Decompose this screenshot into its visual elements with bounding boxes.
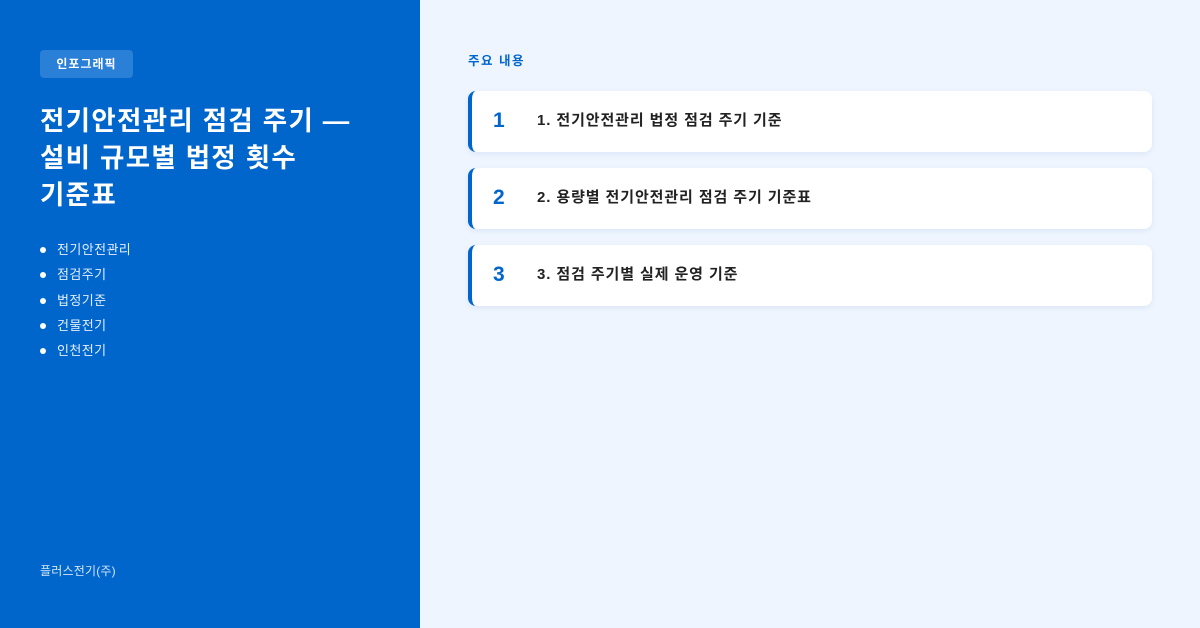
- card 3: 3. 점검 주기별 실제 운영 기준: [537, 266, 738, 283]
- card 1: [468, 91, 1152, 152]
- footer company: 플러스전기(주): [40, 564, 116, 578]
- title: 전기안전관리 점검 주기 —: [40, 106, 351, 136]
- card 2: [468, 168, 1152, 229]
- tag list: 전기안전관리: [57, 242, 131, 257]
- card 2: 2. 용량별 전기안전관리 점검 주기 기준표: [537, 189, 812, 206]
- title: [40, 106, 351, 210]
- tag list: 건물전기: [57, 318, 106, 333]
- card 2: 2: [493, 186, 505, 209]
- card 1: 1: [493, 109, 505, 132]
- card 3: [468, 245, 1152, 306]
- panel: left sidebar: [0, 0, 420, 628]
- title: 기준표: [40, 180, 117, 210]
- tag list: 인천전기: [57, 343, 106, 358]
- section heading: 주요 내용: [468, 54, 525, 68]
- card 1: 1. 전기안전관리 법정 점검 주기 기준: [537, 112, 782, 129]
- tag list: [40, 242, 131, 358]
- card 3: 3: [493, 263, 505, 286]
- title: 설비 규모별 법정 횟수: [40, 143, 297, 173]
- tag list: 점검주기: [57, 267, 106, 282]
- tag list: 법정기준: [57, 293, 106, 308]
- badge: 인포그래픽: [56, 57, 117, 71]
- badge: [40, 50, 133, 78]
